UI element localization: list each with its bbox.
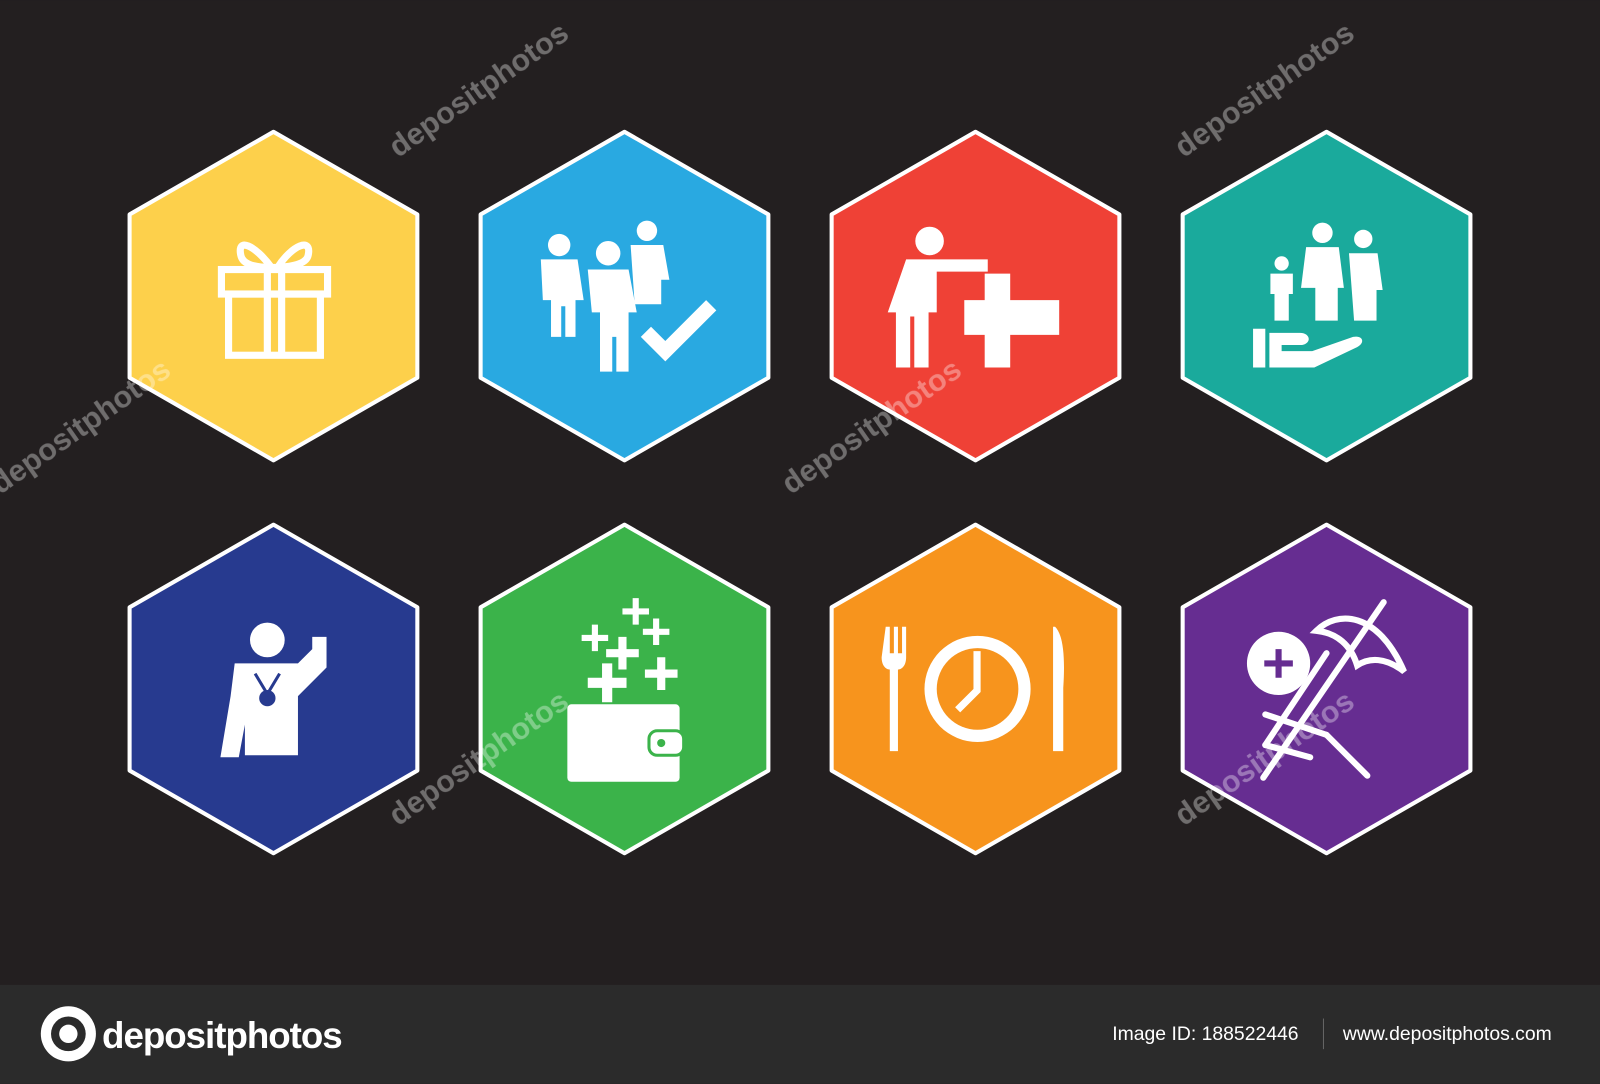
image id: Image ID: 188522446 bbox=[1112, 1023, 1299, 1045]
hexagon: gift bbox=[130, 132, 417, 460]
watermarks: depositphotos bbox=[1168, 684, 1360, 832]
hexagon: meal time bbox=[832, 525, 1119, 853]
watermarks: depositphotos bbox=[1168, 15, 1360, 164]
icon: wallet with pluses bbox=[567, 598, 684, 782]
icon: plate clock cutlery bbox=[882, 627, 1064, 751]
watermarks: depositphotos bbox=[382, 15, 575, 164]
watermarks: depositphotos bbox=[382, 684, 575, 832]
icon: person pointing plus bbox=[888, 227, 1059, 368]
hexagon: family care bbox=[1183, 132, 1470, 460]
icon: plus and beach chair bbox=[1247, 602, 1404, 778]
logo bbox=[41, 1006, 342, 1061]
website: www.depositphotos.com bbox=[1342, 1023, 1552, 1045]
icon: team with check bbox=[541, 221, 716, 372]
hexagon: add person bbox=[832, 132, 1119, 460]
icon: family on hand bbox=[1253, 223, 1383, 368]
icon: gift bbox=[221, 245, 328, 355]
logo: depositphotos bbox=[102, 1015, 342, 1056]
hexagon: medal person bbox=[130, 525, 417, 853]
hexagon: holiday bbox=[1183, 525, 1470, 853]
icon: person with medal bbox=[220, 623, 327, 757]
watermarks bbox=[0, 15, 1360, 832]
hexagon: team check bbox=[481, 132, 768, 460]
hexagon: wallet bonus bbox=[481, 525, 768, 853]
footer bar bbox=[0, 985, 1600, 1084]
watermarks: depositphotos bbox=[775, 352, 968, 501]
